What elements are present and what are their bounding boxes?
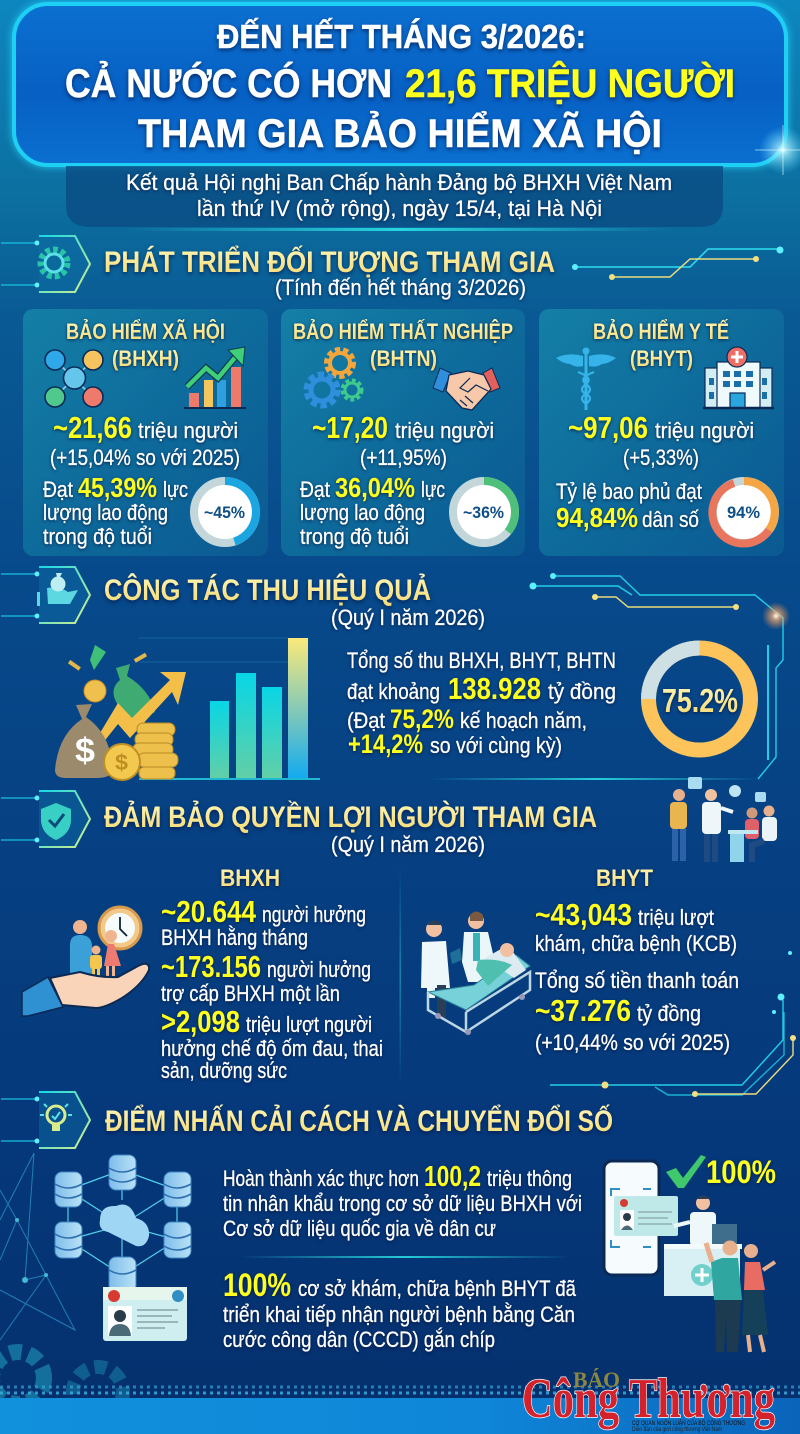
card title: BẢO HIỂM THẤT NGHIỆP [293, 319, 513, 344]
card figures: Tỷ lệ bao phủ đạt [556, 479, 702, 504]
panel: BHYT benefits [421, 865, 739, 1055]
icon: money bags and coins: $ [115, 750, 128, 775]
card figures: lượng lao động [43, 500, 168, 525]
card title [293, 319, 513, 371]
footer band [0, 1387, 800, 1434]
donut 45%: ~45% [204, 503, 245, 522]
icon: gear hexagon [1, 236, 90, 292]
revenue text: (Đạt [347, 708, 385, 733]
donut 94%: 94% [727, 503, 760, 522]
circuit frame [430, 573, 790, 780]
icon: database network with cloud [55, 1155, 191, 1292]
heading text: ĐIỂM NHẤN CẢI CÁCH VÀ CHUYỂN ĐỔI SỐ [105, 1104, 613, 1138]
subtitle text: Kết quả Hội nghị Ban Chấp hành Đảng bộ BHXH Việt Nam [126, 170, 672, 195]
benefit text: triệu lượt [638, 905, 714, 930]
icon: money hexagon [1, 567, 90, 623]
card figures: dân số [642, 507, 699, 532]
revenue text: 138.928 [448, 671, 541, 706]
subtitle text [126, 170, 672, 221]
background network and gears [0, 1153, 123, 1417]
benefit text: sản, dưỡng sức [161, 1058, 287, 1083]
circuit decoration top right [572, 246, 784, 280]
revenue text: tỷ đồng [548, 679, 616, 704]
section 3 heading [1, 791, 597, 847]
panel: BHYT card [539, 309, 784, 556]
card title: (BHYT) [630, 346, 693, 371]
card figures: (+5,33%) [623, 445, 699, 470]
benefit text: ~37.276 [535, 993, 631, 1028]
donut 45% [194, 481, 256, 543]
section 2 heading [1, 567, 431, 623]
card figures: lượng lao động [300, 500, 425, 525]
benefit text: Tổng số tiền thanh toán [535, 968, 739, 993]
icon: gears [307, 350, 361, 405]
benefit text: triệu lượt người [246, 1012, 372, 1037]
icon: hand holding family and clock [22, 907, 149, 1016]
section 1 heading [1, 236, 555, 292]
card figures: trong độ tuổi [300, 524, 409, 549]
benefit text: trợ cấp BHXH một lần [161, 981, 340, 1006]
card figures: 36,04% [335, 472, 415, 503]
panel: BHXH card [23, 309, 268, 556]
card title: BẢO HIỂM XÃ HỘI [66, 319, 225, 344]
benefit text: hưởng chế độ ốm đau, thai [161, 1036, 383, 1061]
revenue text: Tổng số thu BHXH, BHYT, BHTN [347, 648, 616, 673]
icon: doctors and patient bed [421, 912, 530, 1035]
text block: data verification: triệu thông [487, 1166, 572, 1191]
title text: 21,6 TRIỆU NGƯỜI [405, 60, 735, 106]
title text: ĐẾN HẾT THÁNG 3/2026: [217, 18, 586, 55]
panel: BHXH benefits [22, 865, 383, 1083]
card figures: (+11,95%) [360, 445, 447, 470]
card title: BẢO HIỂM Y TẾ [593, 319, 729, 344]
section 1 note: (Tính đến hết tháng 3/2026) [275, 275, 526, 300]
revenue text [347, 648, 616, 759]
card title [593, 319, 729, 371]
donut 36% [453, 481, 515, 543]
benefit text: người hưởng [267, 957, 371, 982]
callout: check 100%: 100% [706, 1154, 776, 1190]
card figures: ~97,06 [568, 410, 648, 445]
donut 75.2% [648, 648, 750, 750]
donut 36%: ~36% [463, 503, 504, 522]
text block: data verification: Hoàn thành xác thực hơn [223, 1166, 419, 1191]
card figures: trong độ tuổi [43, 524, 152, 549]
card figures: triệu người [395, 418, 494, 443]
card figures [300, 410, 494, 549]
icon: light bulb hexagon [1, 1092, 90, 1148]
icon: light flare [755, 125, 800, 175]
panel: BHTN card [281, 309, 525, 556]
icon: people network [45, 350, 103, 407]
title text: CẢ NƯỚC CÓ HƠN [65, 60, 392, 106]
card figures: Đạt [300, 477, 330, 502]
vertical divider [400, 866, 401, 1086]
title panel [14, 4, 786, 165]
card figures [43, 410, 240, 549]
column heading: BHXH [220, 865, 280, 892]
benefit text [161, 894, 383, 1083]
benefit text: >2,098 [161, 1004, 240, 1039]
icon: handshake [433, 368, 500, 410]
icon: ID card [103, 1287, 187, 1341]
section 3 note: (Quý I năm 2026) [331, 832, 485, 857]
revenue text: đạt khoảng [347, 679, 440, 704]
card title: (BHXH) [112, 346, 179, 371]
card figures: triệu người [138, 418, 238, 443]
callout: check 100% [666, 1154, 776, 1190]
section 4 heading [1, 1092, 613, 1148]
text block: data verification: tin nhân khẩu trong cơ sở dữ liệu BHXH với [223, 1191, 582, 1216]
circuit decoration lower right [550, 951, 796, 1097]
icon: rising chart [184, 347, 246, 408]
text block: data verification: Cơ sở dữ liệu quốc gia về dân cư [223, 1216, 496, 1241]
benefit text [535, 897, 739, 1055]
benefit text: ~43,043 [535, 897, 632, 932]
revenue text: +14,2% [348, 729, 423, 759]
icon: hospital [703, 347, 774, 408]
icon: phone scanning card with doctor and patients [604, 1161, 775, 1352]
icon: shield hexagon [1, 791, 90, 847]
card figures [556, 410, 754, 533]
card figures: ~17,20 [312, 410, 388, 445]
text block: chip ID check-in [223, 1267, 577, 1352]
text block: data verification [223, 1161, 582, 1241]
icon: caduceus [556, 348, 616, 410]
card figures: 45,39% [78, 472, 157, 503]
heading text: PHÁT TRIỂN ĐỐI TƯỢNG THAM GIA [104, 245, 555, 279]
icon: money bags and coins [55, 645, 186, 780]
bar chart [139, 638, 320, 780]
benefit text: (+10,44% so với 2025) [535, 1030, 730, 1055]
donut 94% [712, 481, 775, 544]
card title: (BHTN) [370, 346, 437, 371]
revenue text: kế hoạch năm, [460, 708, 587, 733]
text block: chip ID check-in: 100% [223, 1267, 291, 1303]
donut 75.2%: 75.2% [662, 682, 738, 719]
revenue text: 75,2% [390, 704, 454, 734]
card figures: (+15,04% so với 2025) [50, 445, 240, 470]
benefit text: người hưởng [262, 902, 366, 927]
column heading: BHYT [596, 865, 653, 892]
icon: consultation people [670, 777, 777, 862]
card figures: lực [163, 477, 188, 502]
card figures: ~21,66 [53, 410, 132, 445]
title text [65, 18, 735, 156]
benefit text: BHXH hằng tháng [161, 925, 308, 950]
card figures: 94,84% [556, 502, 638, 533]
card figures: triệu người [655, 418, 754, 443]
text block: data verification: 100,2 [424, 1161, 481, 1193]
revenue text: so với cùng kỳ) [430, 733, 562, 758]
card figures: lực [421, 477, 445, 502]
section 2 note: (Quý I năm 2026) [331, 605, 485, 630]
benefit text: ~20.644 [161, 894, 257, 929]
heading text: CÔNG TÁC THU HIỆU QUẢ [104, 573, 431, 607]
card title [66, 319, 225, 371]
benefit text: ~173.156 [161, 949, 261, 984]
logo: Báo Công Thương: Diễn đàn của giới công thương Việt Nam [632, 1426, 722, 1433]
subtitle text: lần thứ IV (mở rộng), ngày 15/4, tại Hà Nội [197, 196, 602, 221]
title text: THAM GIA BẢO HIỂM XÃ HỘI [138, 109, 662, 156]
text block: chip ID check-in: triển khai tiếp nhận người bệnh bằng Căn [223, 1302, 575, 1327]
benefit text: khám, chữa bệnh (KCB) [535, 931, 737, 956]
heading text: ĐẢM BẢO QUYỀN LỢI NGƯỜI THAM GIA [104, 800, 597, 834]
icon: money bags and coins: $ [75, 732, 95, 770]
text block: chip ID check-in: cơ sở khám, chữa bệnh BHYT đã [298, 1276, 577, 1301]
text block: chip ID check-in: cước công dân (CCCD) gắn chíp [223, 1327, 495, 1352]
subtitle panel [66, 166, 723, 227]
logo: Báo Công Thương: BÁO [573, 1367, 620, 1392]
benefit text: tỷ đồng [637, 1001, 701, 1026]
card figures: Đạt [43, 477, 73, 502]
logo: Báo Công Thương: CƠ QUAN NGÔN LUẬN CỦA BỘ CÔNG THƯƠNG [632, 1420, 745, 1427]
